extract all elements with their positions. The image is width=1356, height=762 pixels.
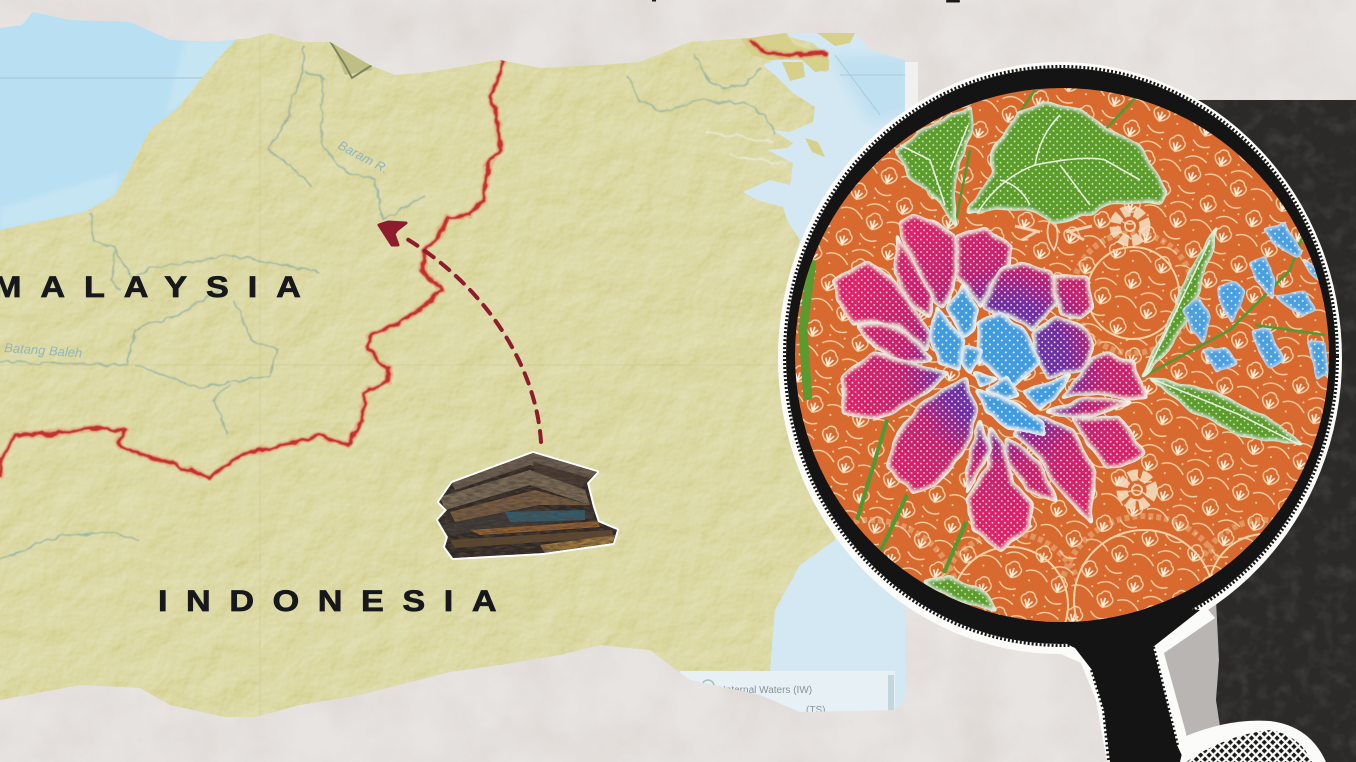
label: INDONESIA: INDONESIA <box>158 584 497 618</box>
leaves <box>896 103 1303 610</box>
clipped headline fragment <box>652 0 960 2</box>
rivers <box>0 45 785 560</box>
map legend box: (TS) <box>806 705 825 716</box>
land <box>0 33 835 717</box>
river label: Batang Baleh: Batang Baleh <box>4 340 83 360</box>
scallop arcs <box>854 230 1274 622</box>
lens white rim <box>778 62 1342 654</box>
stems <box>803 90 1325 573</box>
islands <box>740 33 855 157</box>
border line <box>0 42 825 478</box>
lens black ring <box>784 66 1338 646</box>
hand with halftone <box>1180 721 1326 762</box>
map legend box <box>680 671 895 716</box>
icon: magnifying glass with batik fabric <box>778 62 1342 762</box>
rosette motifs <box>1015 211 1152 505</box>
panel: torn map <box>0 0 910 720</box>
water <box>0 0 910 720</box>
handle outline <box>1000 600 1215 762</box>
river label: Baram R.: Baram R. <box>336 137 391 176</box>
map legend box: Internal Waters (IW) <box>723 685 812 696</box>
arrow: batik origin route <box>379 222 541 442</box>
map white margin <box>904 62 918 132</box>
flower petals <box>833 215 1147 550</box>
flower centre <box>930 285 1070 435</box>
blue sprig <box>1183 223 1328 380</box>
batik fabric <box>795 88 1329 622</box>
icon: stack of batik cloth <box>436 451 619 560</box>
dark backing panel <box>1160 100 1356 762</box>
handle <box>1030 600 1200 762</box>
label: MALAYSIA: MALAYSIA <box>0 270 301 304</box>
